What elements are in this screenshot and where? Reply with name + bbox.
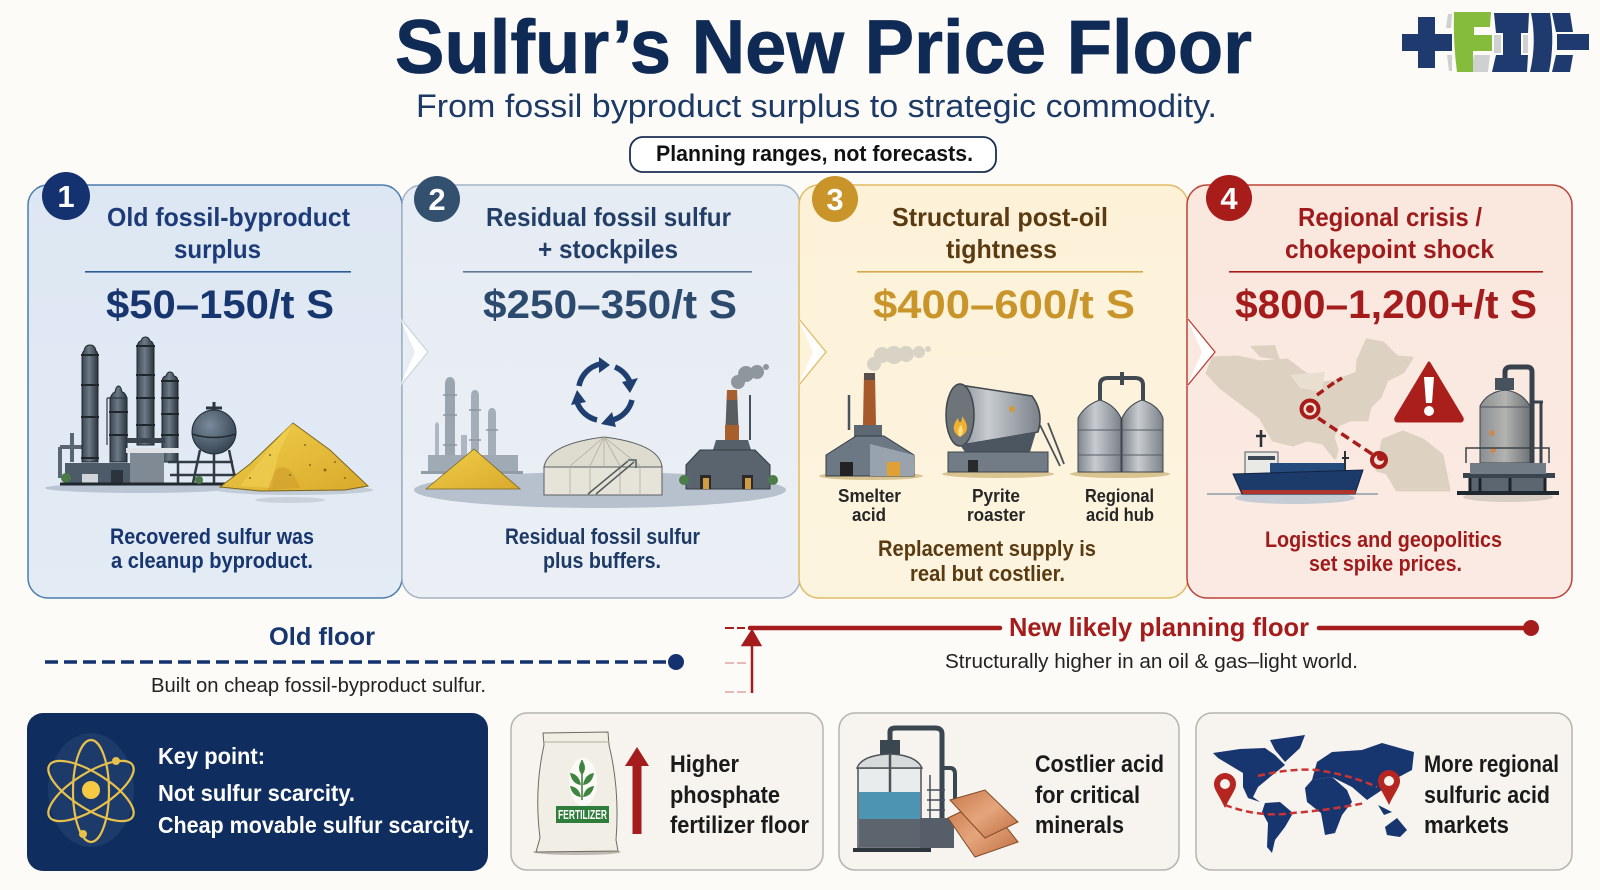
caption 4: Logistics and geopolitics [1265, 527, 1502, 552]
label: regional acid hub [1085, 486, 1154, 525]
new floor note: Structurally higher in an oil & gas–light world. [945, 651, 1358, 673]
panel 2: residual and stockpiles [402, 176, 800, 598]
new floor marker [725, 612, 1539, 693]
caption 4: set spike prices. [1309, 551, 1462, 576]
panel 4: regional crisis [1187, 175, 1572, 598]
heading 1 [107, 202, 350, 264]
label: smelter acid [838, 486, 901, 525]
caption 1: Recovered sulfur was [110, 524, 314, 549]
minerals text: for critical [1035, 782, 1140, 809]
arrow: panel 2 to 3 [798, 318, 826, 386]
icon: faded refinery [421, 377, 523, 474]
icon: smelter [819, 346, 931, 480]
icon: copper sheets [948, 790, 1018, 857]
icon: storage dome [544, 437, 662, 495]
key point text: Cheap movable sulfur scarcity. [158, 812, 474, 838]
label: regional acid hub: acid hub [1086, 505, 1154, 525]
markets text: sulfuric acid [1424, 782, 1550, 809]
logo [1402, 12, 1589, 72]
key point text: Key point: [158, 743, 265, 769]
old floor label: Old floor [269, 623, 375, 651]
icon: fertilizer bag [533, 732, 621, 855]
minerals text: Costlier acid [1035, 751, 1164, 778]
badge 4 [1206, 175, 1252, 221]
fertilizer text [670, 751, 809, 839]
icon: atom [40, 733, 142, 847]
subtitle: From fossil byproduct surplus to strategic commodity. [416, 88, 1217, 124]
heading 2: Residual fossil sulfur [486, 202, 731, 232]
icon: sulfur pile [426, 449, 520, 489]
heading 2: + stockpiles [538, 234, 678, 264]
heading 1: Old fossil-byproduct [107, 202, 350, 232]
heading 3: tightness [946, 234, 1057, 264]
ground shadow [414, 472, 786, 508]
icon: fertilizer bag: FERTILIZER [558, 808, 607, 822]
icon: sulfur pile [217, 423, 373, 503]
badge 1: 1 [57, 179, 75, 214]
panel: key point [27, 713, 488, 871]
key point text: Not sulfur scarcity. [158, 780, 355, 806]
caption 1 [110, 524, 314, 573]
heading 4: Regional crisis / [1298, 202, 1482, 232]
new floor label: New likely planning floor [1009, 612, 1309, 642]
heading 4 [1285, 202, 1495, 264]
panel: fertilizer [511, 713, 823, 870]
caption 2: Residual fossil sulfur [505, 524, 700, 549]
heading 3: Structural post-oil [892, 202, 1108, 232]
icon: cargo ship [1207, 430, 1378, 504]
label: regional acid hub: Regional [1085, 486, 1154, 506]
caption 3 [878, 536, 1096, 586]
badge 3 [812, 176, 858, 222]
up arrow [625, 747, 649, 834]
fertilizer text: Higher [670, 751, 739, 778]
caption 2: plus buffers. [543, 548, 661, 573]
panel 3: structural tightness [799, 176, 1188, 598]
key point text [158, 743, 474, 838]
label: pyrite roaster [967, 486, 1025, 525]
caption 3: real but costlier. [910, 561, 1065, 586]
arrow: panel 3 to 4 [1187, 318, 1215, 386]
badge 2 [414, 176, 460, 222]
markets text [1424, 751, 1559, 839]
badge 2: 2 [428, 182, 446, 217]
badge 1 [42, 172, 90, 220]
icon: refinery [45, 337, 236, 493]
caption 3: Replacement supply is [878, 536, 1096, 561]
markets text: More regional [1424, 751, 1559, 778]
heading 1: surplus [174, 234, 261, 264]
icon: pyrite roaster [942, 384, 1064, 478]
price 4: $800–1,200+/t S [1235, 283, 1537, 327]
price 3: $400–600/t S [873, 283, 1135, 327]
panel: regional markets [1196, 713, 1572, 870]
icon: cycle arrows [571, 357, 638, 427]
price 2: $250–350/t S [483, 283, 737, 327]
icon: world map [1213, 735, 1414, 853]
fertilizer text: fertilizer floor [670, 812, 809, 839]
minerals text [1035, 751, 1164, 839]
heading 4: chokepoint shock [1285, 234, 1495, 264]
icon: acid hub silos [1070, 372, 1170, 478]
badge 4: 4 [1220, 181, 1238, 216]
caption 1: a cleanup byproduct. [111, 548, 313, 573]
label: smelter acid: Smelter [838, 486, 901, 506]
title: Sulfur’s New Price Floor [395, 5, 1252, 90]
fertilizer text: phosphate [670, 782, 780, 809]
map with shipping route [1207, 340, 1449, 490]
label: pyrite roaster: Pyrite [972, 486, 1020, 506]
price 1: $50–150/t S [106, 283, 334, 327]
icon: factory with smoke [679, 364, 778, 489]
note pill [630, 137, 996, 172]
caption 4 [1265, 527, 1502, 576]
old floor marker [45, 623, 684, 697]
panel: critical minerals [839, 713, 1179, 870]
old floor note: Built on cheap fossil-byproduct sulfur. [151, 675, 486, 697]
badge 3: 3 [826, 182, 844, 217]
label: smelter acid: acid [852, 505, 886, 525]
up arrow [743, 631, 760, 693]
caption 2 [505, 524, 700, 573]
label: pyrite roaster: roaster [967, 505, 1025, 525]
icon: acid tank [853, 728, 955, 852]
minerals text: minerals [1035, 812, 1124, 839]
panel 1: old surplus [28, 172, 402, 598]
icon: alert triangle [1396, 363, 1462, 421]
arrow: panel 1 to 2 [400, 318, 428, 386]
note pill: Planning ranges, not forecasts. [656, 141, 973, 166]
heading 3 [892, 202, 1108, 264]
heading 2 [486, 202, 731, 264]
icon: storage tank [1457, 367, 1559, 502]
markets text: markets [1424, 812, 1509, 839]
